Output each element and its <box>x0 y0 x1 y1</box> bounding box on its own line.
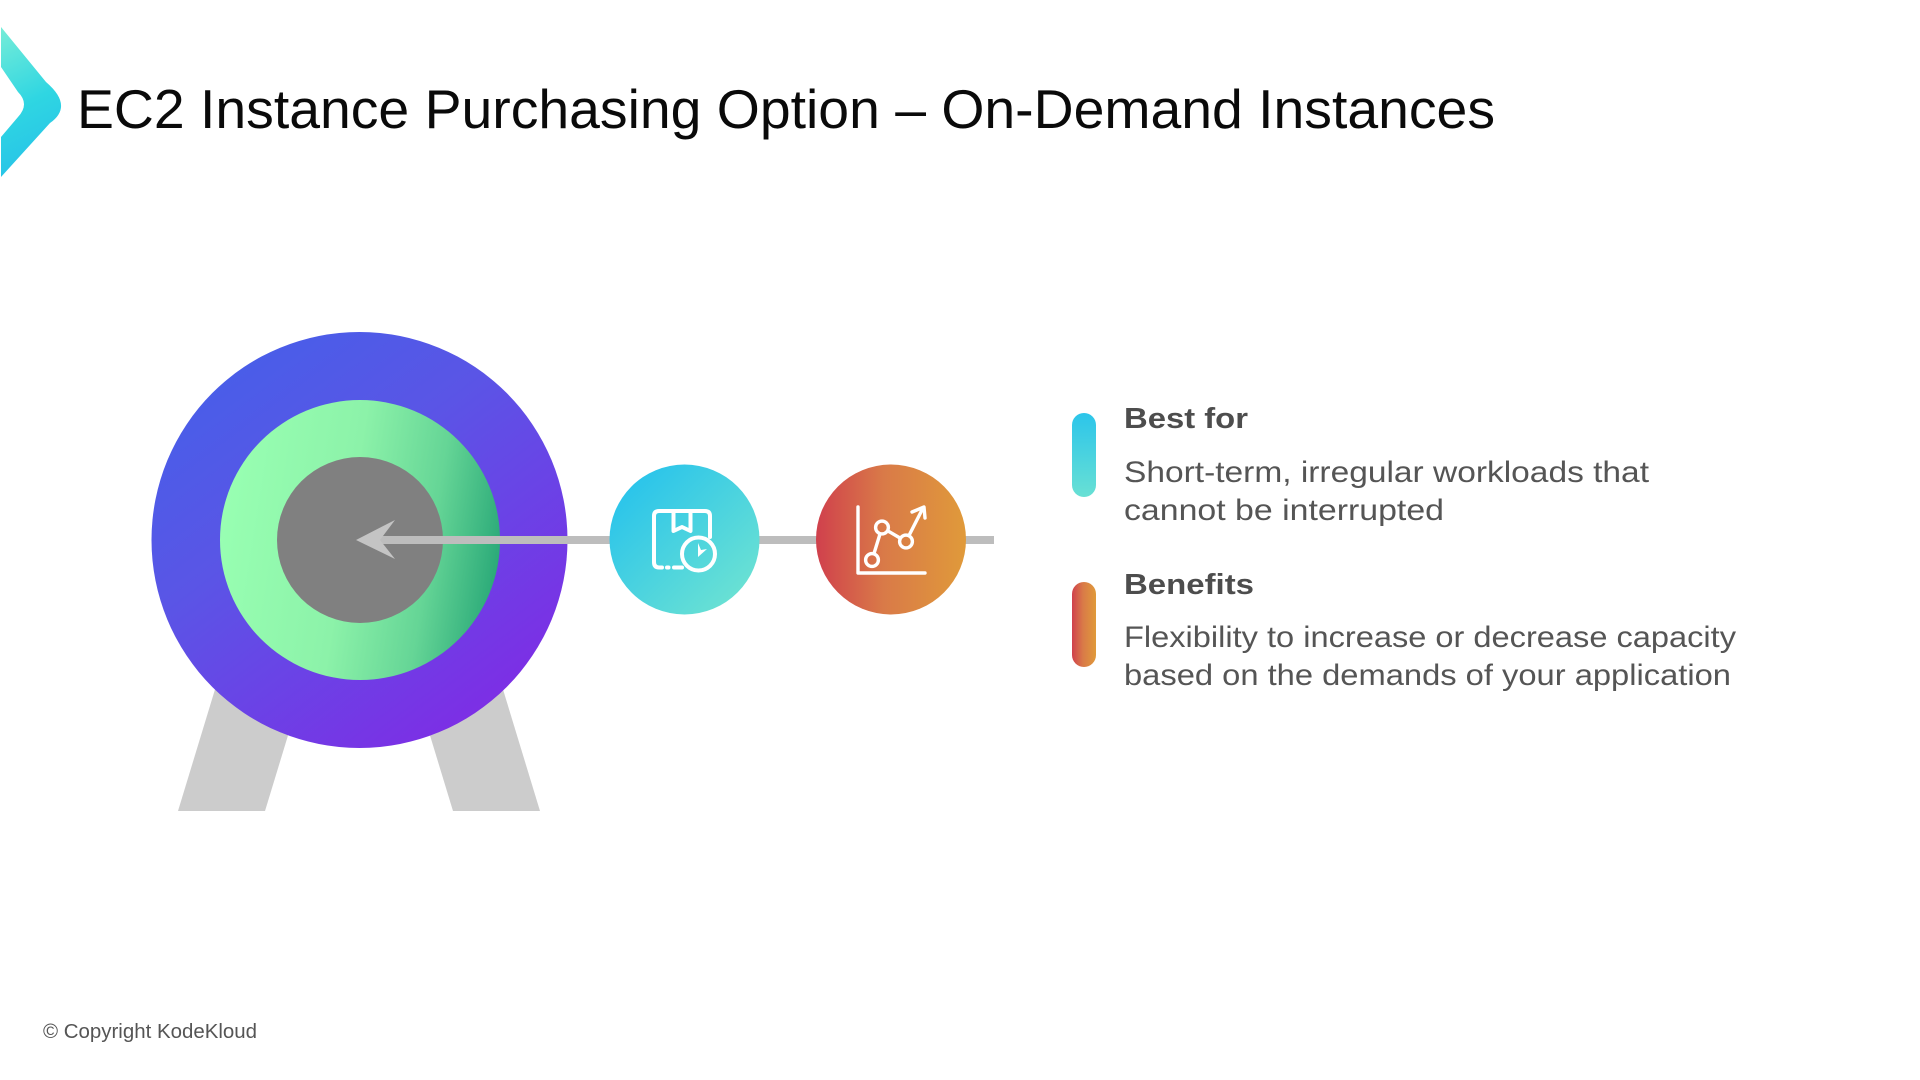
outer target ring <box>152 332 568 748</box>
copyright footer: © Copyright KodeKloud <box>43 1021 257 1043</box>
middle target ring <box>220 400 500 680</box>
best for heading: Best for <box>1124 403 1248 435</box>
benefits accent bar <box>1072 582 1096 667</box>
panel: best for <box>1072 403 1650 527</box>
logo chevron <box>1 27 61 177</box>
best for description: Short-term, irregular workloads that <box>1124 456 1650 489</box>
icon: growth line chart <box>816 464 966 614</box>
icon: delivery box with clock <box>610 464 760 614</box>
benefits description <box>1124 621 1736 692</box>
right target leg <box>404 650 540 811</box>
benefits heading: Benefits <box>1124 569 1254 601</box>
arrow pointing to bullseye <box>356 520 994 559</box>
best for description: cannot be interrupted <box>1124 494 1444 527</box>
target diagram <box>152 332 994 811</box>
best for description <box>1124 456 1650 527</box>
benefits description: based on the demands of your application <box>1124 659 1731 692</box>
panel: benefits <box>1072 569 1736 692</box>
best for accent bar <box>1072 413 1096 497</box>
benefits description: Flexibility to increase or decrease capacity <box>1124 621 1736 654</box>
title: EC2 Instance Purchasing Option – On-Demand Instances <box>77 78 1495 140</box>
left target leg <box>178 650 314 811</box>
target bullseye <box>277 457 443 623</box>
